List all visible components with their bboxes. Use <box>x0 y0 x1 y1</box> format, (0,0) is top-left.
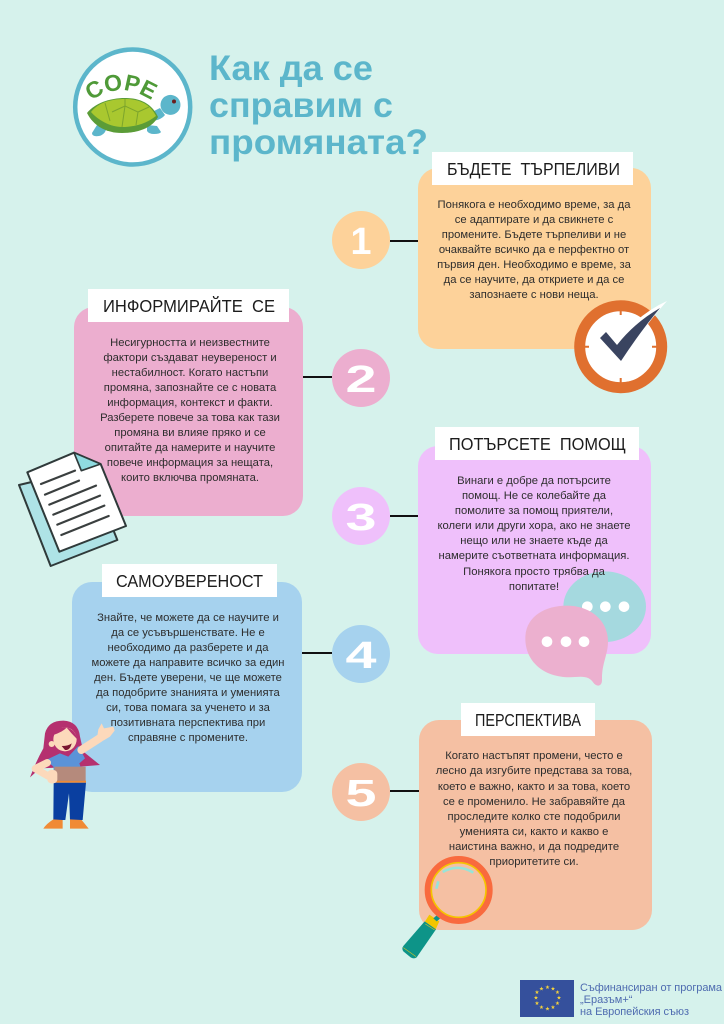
icon: EU flag: ★ <box>545 985 550 991</box>
heading 2 <box>88 289 289 322</box>
text block 4: ден. Бъдете уверени, че ще можете <box>94 672 282 684</box>
text block 4: необходимо да разберете и да <box>108 642 269 654</box>
text block 3: намерите съответната информация. <box>439 550 629 562</box>
text block 3: попитате! <box>509 581 559 593</box>
text block 3: помощ. Не се колебайте да <box>462 490 607 502</box>
title: промяната? <box>209 123 428 162</box>
text block 4: си, това помага за ученето и за <box>106 702 271 714</box>
text block 1 <box>437 199 632 301</box>
heading 3: ПОТЪРСЕТЕ ПОМОЩ <box>449 434 626 454</box>
text block 3: помолите за помощ приятели, <box>455 505 613 517</box>
number marker 3: 3 <box>346 497 376 539</box>
text block 2: промяна, запознайте се с новата <box>104 382 277 394</box>
text block 3 <box>437 475 631 593</box>
number marker 5 <box>332 763 390 821</box>
icon: EU flag: ★ <box>534 996 539 1002</box>
panel 1: patience <box>418 152 651 349</box>
text block 4: да се усъвършенствате. Не е <box>111 627 265 639</box>
icon: EU flag: ★ <box>555 1001 560 1007</box>
text block 3: колеги или други хора, ако не знаете <box>437 520 631 532</box>
icon: magnifying glass <box>402 859 489 958</box>
text block 5: проследите колко сте подобрили <box>448 811 620 823</box>
heading 4: САМОУВЕРЕНОСТ <box>116 571 263 591</box>
text block 3: нещо или не знаете къде да <box>460 535 608 547</box>
title: справим с <box>209 86 393 125</box>
heading 5: ПЕРСПЕКТИВА <box>475 710 581 730</box>
text block 5: което е важно, както и за това, което <box>438 781 630 793</box>
text block 1: Понякога е необходимо време, за да <box>438 199 631 211</box>
logo: COPE turtle: COPE <box>86 74 158 100</box>
panel 3: ask for help <box>418 427 651 686</box>
text block 5: уменията си, както и какво е <box>460 826 608 838</box>
text block 5 <box>436 750 632 868</box>
connector lines and numbered markers <box>302 211 419 821</box>
title: Как да се <box>209 49 373 88</box>
heading 1: БЪДЕТЕ ТЪРПЕЛИВИ <box>447 159 620 179</box>
text block 5: приоритетите си. <box>489 856 579 868</box>
text block 2: промяна ви влияе пряко и се <box>114 427 266 439</box>
icon: EU flag: ★ <box>545 1006 550 1012</box>
number marker 2 <box>332 349 390 407</box>
text block 3: Винаги е добре да потърсите <box>457 475 611 487</box>
text block 4: позитивната перспектива при <box>111 717 265 729</box>
text block 2 <box>100 337 280 484</box>
text block 2: повече информация за нещата, <box>107 457 273 469</box>
text block 1: промените. Бъдете търпеливи и не <box>442 229 626 241</box>
icon: EU flag: ★ <box>551 1005 556 1011</box>
text block 1: първия ден. Необходимо е време, за <box>437 259 632 271</box>
icon: EU flag: ★ <box>557 996 562 1002</box>
text block 5: наистина важно, и да подредите <box>449 841 619 853</box>
text block 4: да подобрите знанията и уменията <box>96 687 281 699</box>
text block 2: които включва промяната. <box>121 472 259 484</box>
heading 3 <box>435 427 639 460</box>
EU co-funding logo <box>520 980 723 1018</box>
text block 2: опитайте да намерите и научите <box>105 442 275 454</box>
heading 2: ИНФОРМИРАЙТЕ СЕ <box>103 295 275 316</box>
icon: EU flag: ★ <box>555 990 560 996</box>
icon: EU flag: ★ <box>535 1001 540 1007</box>
text block 5: се е променило. Не забравяйте да <box>443 796 626 808</box>
number marker 5: 5 <box>346 773 376 815</box>
heading 5 <box>461 703 595 736</box>
text block 5: лесно да изгубите представа за това, <box>436 765 632 777</box>
heading 4 <box>102 564 277 597</box>
icon: EU flag <box>520 980 574 1017</box>
icon: EU flag: ★ <box>539 1005 544 1011</box>
text block 2: нестабилност. Когато настъпи <box>112 367 268 379</box>
text block 2: Несигурността и неизвестните <box>110 337 270 349</box>
icon: clock with check mark <box>580 301 667 388</box>
text block 4: справяне с промените. <box>128 732 248 744</box>
text block 2: фактори създават неувереност и <box>103 352 277 364</box>
icon: speech bubbles <box>525 571 646 686</box>
number marker 2: 2 <box>346 359 376 401</box>
text block 2: Разберете повече за това как тази <box>100 412 280 424</box>
EU text: на Европейския съюз <box>580 1006 689 1018</box>
text block 1: да се научите, да откриете и да се <box>444 274 624 286</box>
number marker 4: 4 <box>346 635 376 677</box>
number marker 1: 1 <box>350 221 372 263</box>
number marker 4 <box>332 625 390 683</box>
EU text: Съфинансиран от програма <box>580 982 723 994</box>
text block 1: запознаете с нови неща. <box>469 289 599 301</box>
text block 4 <box>91 612 285 744</box>
EU text <box>580 982 723 1018</box>
text block 5: Когато настъпят промени, често е <box>445 750 623 762</box>
text block 2: информация, контекст и факти. <box>107 397 273 409</box>
icon: documents <box>19 453 126 566</box>
number marker 3 <box>332 487 390 545</box>
icon: EU flag: ★ <box>539 986 544 992</box>
text block 1: очаквайте всичко да е перфектно от <box>439 244 629 256</box>
EU text: „Еразъм+“ <box>580 994 633 1006</box>
icon: EU flag: ★ <box>551 986 556 992</box>
text block 3: Понякога просто трябва да <box>463 566 606 578</box>
title <box>209 49 428 162</box>
text block 4: можете да направите всичко за един <box>91 657 285 669</box>
icon: EU flag: ★ <box>535 990 540 996</box>
panel 4: self-confidence <box>72 564 302 792</box>
number marker 1 <box>332 211 390 269</box>
panel 2: get informed <box>74 289 303 516</box>
text block 4: Знайте, че можете да се научите и <box>97 612 279 624</box>
panel 5: perspective <box>419 703 652 930</box>
heading 1 <box>432 152 633 185</box>
logo: COPE turtle <box>72 47 192 167</box>
text block 1: се адаптирате и да свикнете с <box>455 214 614 226</box>
icon: waving woman <box>30 721 115 829</box>
